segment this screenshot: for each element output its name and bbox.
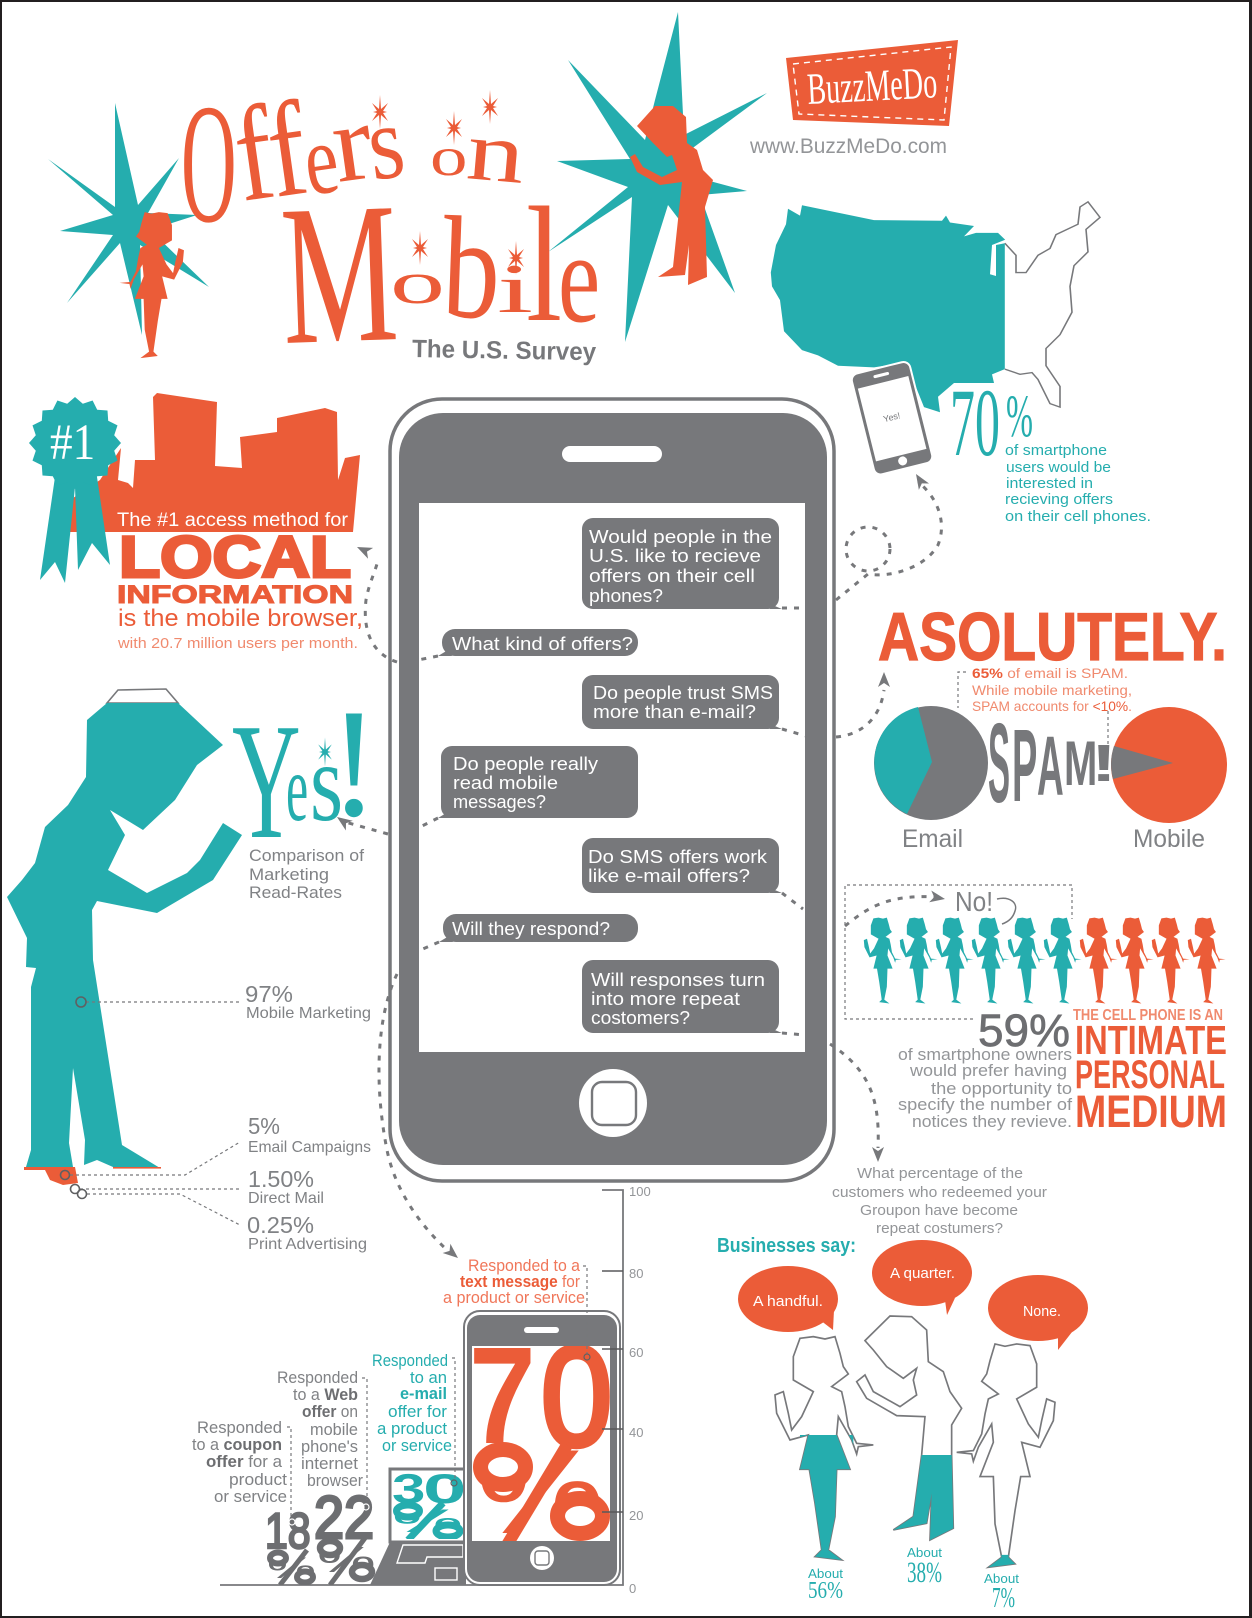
18 percent: 18 [265,1503,311,1559]
text: local information: is the mobile browser, [118,605,363,632]
label: e-mail: or service [382,1437,452,1455]
label: web offer [277,1369,369,1510]
spam note: 65% of email is SPAM. [972,665,1128,681]
bottom phone with 70 percent: % [476,1426,605,1559]
label: e-mail [372,1352,457,1486]
big phone body [390,399,834,1181]
label: web offer: mobile [310,1421,358,1439]
chat bubbles: like e-mail offers? [588,865,750,886]
18 percent [267,1512,316,1585]
read-rate values: Mobile Marketing [246,1005,371,1022]
bottom phone with 70 percent: 7 [469,1319,536,1473]
text: local information: with 20.7 million users per month. [117,635,358,652]
stat: 59 percent: the opportunity to [931,1079,1072,1098]
logo: BuzzMeDo tag: BuzzMeDo [806,58,938,114]
dashed box with No!: No! [955,886,993,917]
stat: 59 percent: would prefer having [909,1061,1067,1080]
stat: 59 percent: 59% [978,1005,1070,1056]
percent labels under figures: 7% [992,1583,1015,1614]
label: web offer: offer on [302,1403,358,1421]
stat: 70 percent: on their cell phones. [1005,508,1151,525]
stat: 70 percent: recieving offers [1005,491,1113,508]
chart axis: 60 [629,1345,643,1360]
US map [771,202,1100,412]
label: e-mail: offer for [388,1403,448,1421]
chat bubbles: U.S. like to recieve [589,545,761,566]
teal starburst right [548,12,767,342]
pie labels: Mobile [1133,825,1205,853]
read-rate values: 5% [248,1113,280,1139]
groupon question: customers who redeemed your [832,1184,1047,1201]
laptop with 30 percent [370,1465,466,1585]
text: local information: LOCAL [119,525,351,590]
title: Offers on Mobile: n [463,103,529,201]
stat: 70 percent: 70 [950,370,1000,476]
chat bubbles: costomers? [591,1007,690,1028]
read-rate values: 1.50% [248,1166,314,1192]
chat bubbles: read mobile [453,772,558,793]
title: Offers on Mobile: o [430,126,467,188]
title: Offers on Mobile: M [278,162,401,387]
stat: 59 percent: notices they revieve. [912,1112,1072,1131]
pie: email [874,706,988,820]
title: Offers on Mobile [181,69,600,387]
groupon question: Groupon have become [860,1202,1018,1219]
pie labels [902,825,1205,853]
spam note: SPAM accounts for <10%. [972,698,1132,714]
speech bubbles: None. [1023,1303,1061,1320]
label: text message [443,1257,590,1360]
title: Offers on Mobile: l [526,174,562,357]
percent labels under figures: About [984,1571,1019,1586]
chat bubbles: offers on their cell [589,565,755,586]
label: coupon offer: or service [214,1488,287,1506]
22 percent: % [317,1540,376,1580]
chat bubbles: What kind of offers? [452,633,633,654]
spam note: While mobile marketing, [972,682,1132,698]
stat: 70 percent: interested in [1006,475,1093,492]
label: web offer: phone's [301,1438,358,1456]
spam perspective word: ! [1091,734,1117,792]
title: Offers on Mobile: b [440,187,503,350]
chat bubbles: phones? [589,585,663,606]
stat: 59 percent: specify the number of [898,1095,1072,1114]
chart axis [220,1184,651,1596]
label: web offer: browser [307,1472,363,1490]
dashed box with No! [845,885,1072,1019]
chart axis: 20 [629,1508,643,1523]
label: web offer: Responded [277,1369,358,1387]
18 percent: % [267,1552,316,1585]
figure: woman 7 percent [957,1344,1055,1567]
label: e-mail: Responded [372,1352,448,1370]
label: coupon offer: to a coupon [192,1436,282,1454]
label: text message: Responded to a [468,1257,581,1275]
orange girl silhouette left [120,212,184,358]
pie labels: Email [902,825,963,853]
logo: BuzzMeDo tag [786,40,958,126]
title: Offers on Mobile: r [325,81,379,206]
chart tick marks [602,1271,623,1512]
orange man silhouette top [630,106,713,285]
percent labels under figures: About [808,1566,843,1581]
title: Offers on Mobile: e [558,209,600,349]
read-rates caption: Read-Rates [249,883,342,902]
Yes! heading: s [310,720,343,845]
spam note [958,665,1132,751]
text: local information: The #1 access method for [117,510,349,531]
chat bubbles: Do people trust SMS [593,682,773,703]
spam perspective word [988,700,1117,826]
label: coupon offer: product [229,1471,287,1489]
label: e-mail: a product [377,1420,447,1438]
speech bubbles: A handful. [753,1293,823,1310]
chat bubbles: Will responses turn [591,969,765,990]
title: Offers on Mobile: i [497,250,533,327]
laptop with 30 percent: % [392,1503,463,1539]
laptop with 30 percent: 3 [392,1465,425,1512]
percent labels under figures: 56% [808,1578,843,1604]
stat: 70 percent: % [1006,384,1033,450]
people row: 59 percent pictogram [864,918,1226,1003]
figure: woman 56 percent [775,1337,873,1560]
ribbon #1 badge [29,393,360,583]
label: coupon offer: offer for a [206,1453,283,1471]
22 percent [315,1494,376,1585]
chat bubbles: Will they respond? [452,918,610,939]
groupon question [832,1165,1047,1237]
label: web offer: to a Web [293,1386,358,1404]
big teal figure reading phone [7,689,242,1185]
chart axis: 80 [629,1266,643,1281]
chat bubbles: more than e-mail? [593,701,756,722]
22 percent: 22 [314,1484,374,1552]
chart axis: 0 [629,1581,636,1596]
label: coupon offer: Responded [197,1419,282,1437]
Yes! heading: ! [329,677,379,849]
title sparkle stars [372,90,524,275]
intimate personal medium [1073,1007,1227,1137]
dashed connector arrows [334,471,946,1263]
chart axis: 100 [629,1184,651,1199]
read-rate values: Print Advertising [248,1236,367,1253]
stat: 70 percent [950,370,1151,525]
speech bubbles: A quarter. [890,1265,955,1282]
label: e-mail: e-mail [400,1385,447,1403]
label: text message: a product or service [443,1289,585,1307]
read-rate values: 97% [245,981,293,1007]
pie: mobile [1111,707,1227,823]
chat bubbles [438,518,782,1033]
percent labels under figures [808,1545,1019,1614]
Yes! heading [232,677,379,874]
Yes! heading: e [286,736,308,841]
read-rate leader lines [60,997,240,1225]
label: e-mail: to an [410,1369,447,1387]
title: Offers on Mobile: f [225,76,282,230]
label: web offer: internet [301,1455,358,1473]
chart axis: 40 [629,1425,643,1440]
title: Offers on Mobile: O [181,69,237,258]
label: coupon offer [192,1419,295,1525]
bottom phone with 70 percent [464,1311,620,1585]
read-rates caption: Comparison of [249,846,364,865]
chat bubbles: Do SMS offers work [588,846,768,867]
groupon question: repeat costumers? [876,1220,1003,1237]
stat: 70 percent: of smartphone [1005,442,1107,459]
read-rates caption: Marketing [249,865,329,884]
read-rates caption [249,846,364,902]
website url: www.BuzzMeDo.com [749,135,947,158]
text: local information [117,510,363,652]
title: Offers on Mobile: s [360,84,411,203]
stat: 70 percent: users would be [1006,459,1111,476]
title: Offers on Mobile: f [258,72,315,226]
speech bubbles [738,1240,1088,1350]
title: Offers on Mobile: e [297,103,345,217]
read-rate values [245,981,371,1253]
Yes! heading: Y [232,690,301,874]
read-rate values: Email Campaigns [248,1139,371,1156]
stat: 59 percent: of smartphone owners [898,1045,1072,1064]
bottom phone with 70 percent: 0 [541,1317,612,1475]
text: local information: INFORMATION [117,581,353,609]
figure: man 38 percent [857,1316,962,1540]
spam perspective word: A [1037,719,1064,813]
laptop with 30 percent: 0 [423,1465,466,1512]
read-rate values: 0.25% [247,1212,314,1238]
chat bubbles: Do people really [453,753,599,774]
small tilted phone with Yes: Yes! [882,410,901,424]
ribbon #1 badge: #1 [50,415,95,471]
chat bubbles: messages? [453,791,546,812]
spam perspective word: S [988,700,1010,826]
label: text message: text message for [460,1273,580,1291]
read-rate values: Direct Mail [248,1190,324,1207]
percent labels under figures: 38% [907,1556,942,1589]
chat bubbles: into more repeat [591,988,740,1009]
subtitle: The U.S. Survey [412,335,596,366]
businesses say heading: Businesses say: [717,1235,856,1257]
groupon question: What percentage of the [857,1165,1023,1182]
teal starburst left [48,103,209,335]
spam perspective word: P [1012,709,1037,824]
small tilted phone with Yes [850,361,934,476]
stat: 59 percent [898,1005,1072,1131]
chat bubbles: Would people in the [589,526,772,547]
percent labels under figures: About [907,1545,942,1560]
spam perspective word: M [1064,729,1097,799]
title: Offers on Mobile: o [390,250,445,317]
